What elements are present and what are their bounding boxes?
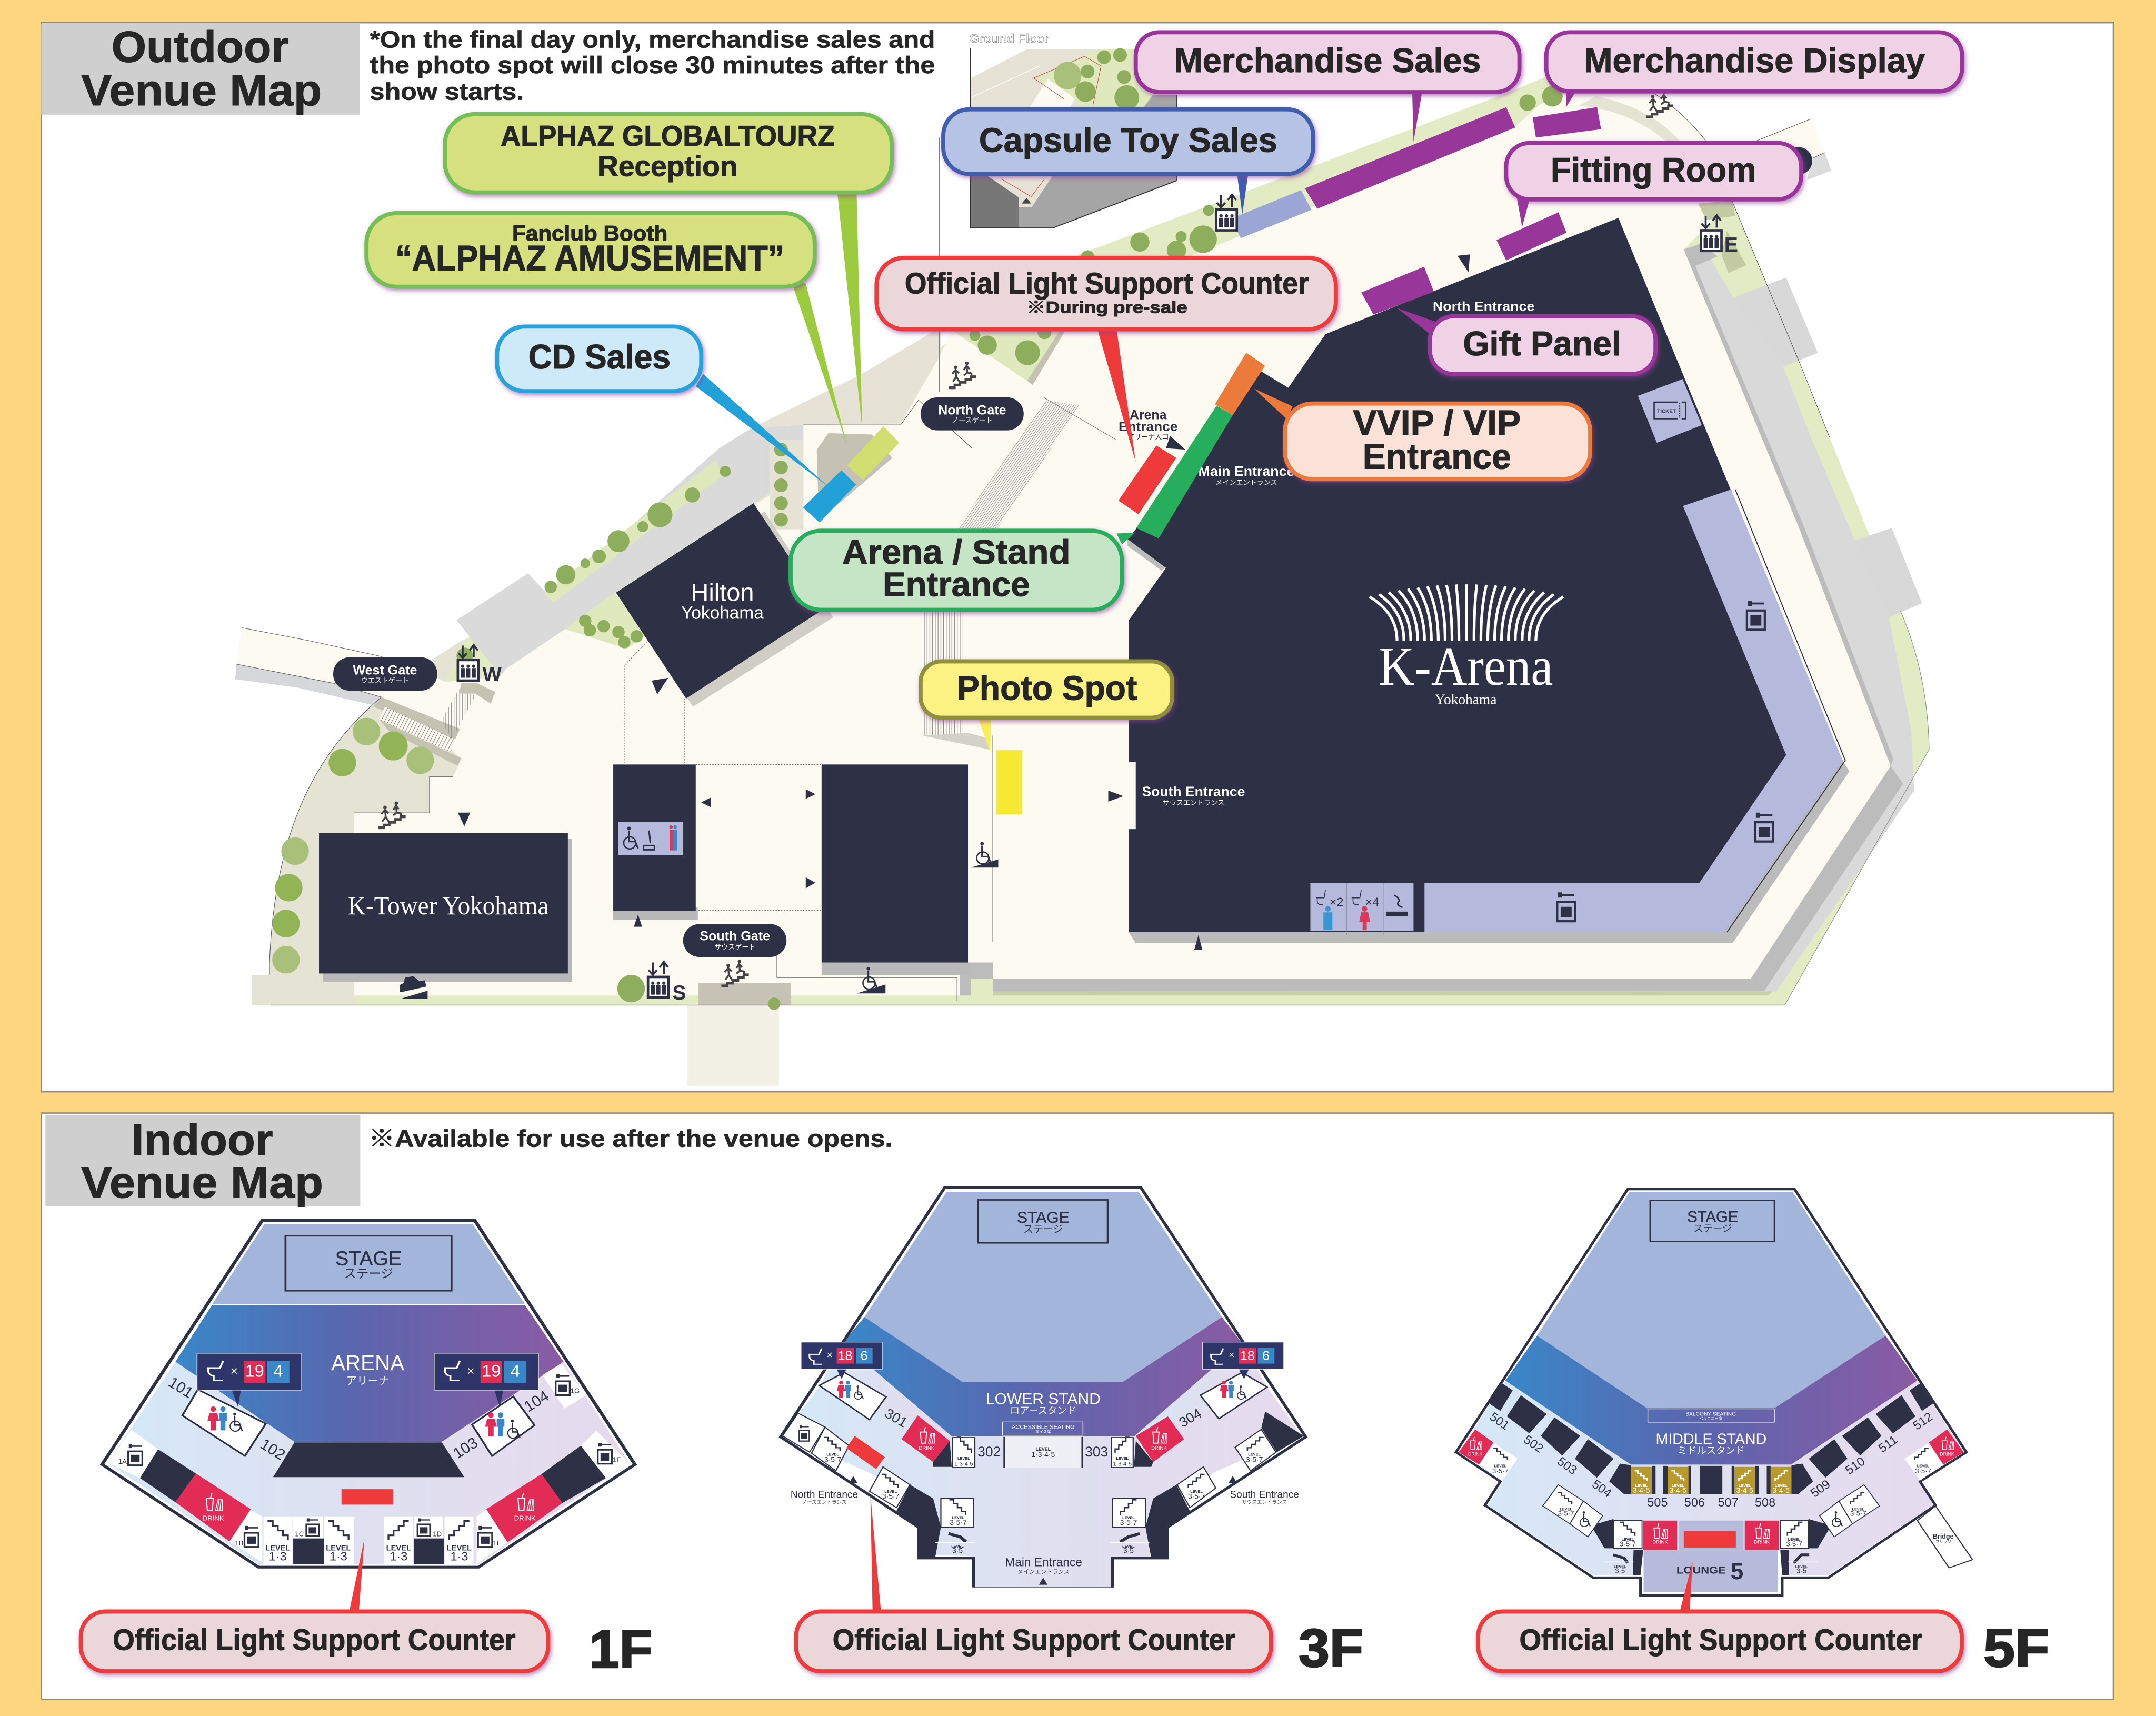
- stair cores: 1·3: [330, 1550, 347, 1563]
- site map ground: [235, 77, 1929, 1086]
- gold stairs: LEVEL: [1775, 1483, 1788, 1488]
- entrance labels: サウスエントランス: [1242, 1500, 1287, 1505]
- lockers: [108, 1363, 629, 1564]
- label: Main Entrance: メインエントランス: [1215, 478, 1277, 486]
- callout: Arena / Stand Entrance: Arena / Stand: [842, 533, 1071, 571]
- concessions: DRINK: [514, 1514, 536, 1522]
- stage box: ステージ: [1693, 1223, 1732, 1234]
- entrance labels: ノースエントランス: [802, 1500, 846, 1505]
- callout: Fitting Room: [1506, 143, 1801, 227]
- stage box: [285, 1236, 452, 1291]
- gate: West Gate: [333, 657, 437, 691]
- gold stairs: LEVEL: [1635, 1483, 1648, 1488]
- icon: elevator west: [458, 645, 502, 686]
- icons: stairs: [378, 91, 1673, 987]
- restroom count: right: 19: [482, 1362, 501, 1381]
- stair and accessibility icons: [1558, 1492, 1866, 1574]
- gate: West Gate: West Gate: [353, 663, 417, 677]
- restroom count: left: [197, 1353, 302, 1407]
- icons: accessible routes: [856, 842, 998, 993]
- bar: merchandise display: [1533, 107, 1601, 137]
- label: 1F: 1F: [589, 1619, 653, 1679]
- building: south block: [822, 764, 970, 975]
- restrooms: [819, 1372, 1267, 1420]
- restroom count: right: ×: [467, 1364, 475, 1379]
- corridor: [108, 1362, 629, 1564]
- stair icons: 1·3·4·5: [954, 1461, 973, 1467]
- label: South Entrance: サウスエントランス: [1163, 799, 1224, 806]
- corner concessions and stairs: LEVEL: [1494, 1463, 1507, 1468]
- gold stairs: LEVEL: [1672, 1483, 1684, 1488]
- concessions: DRINK: [203, 1514, 224, 1522]
- label: MIDDLE STAND: MIDDLE STAND: [1656, 1431, 1766, 1448]
- section numbers: 502: [1521, 1432, 1546, 1455]
- corner concessions and stairs: [1459, 1430, 1964, 1481]
- callout: 5F counter: [1478, 1561, 1962, 1671]
- callout: Gift Panel: Gift Panel: [1463, 324, 1621, 363]
- stage box: STAGE: [1017, 1209, 1070, 1226]
- lower stand: [842, 1317, 1242, 1436]
- stair and accessibility icons: LEVEL: [1614, 1564, 1626, 1569]
- stage: [212, 1224, 525, 1304]
- gate: North Gate: ノースゲート: [952, 416, 993, 424]
- stair icons: LEVEL: [884, 1489, 897, 1494]
- label: Arena Entrance: アリーナ入口: [1127, 433, 1169, 441]
- restroom count: left: 4: [273, 1362, 283, 1381]
- ticket counter: [1638, 379, 1702, 443]
- stair icons: 3·5·7: [1188, 1492, 1205, 1500]
- corner concessions and stairs: DRINK: [1940, 1452, 1954, 1457]
- gold stairs: 3·4·5: [1633, 1486, 1650, 1494]
- section numbers: 509: [1808, 1477, 1833, 1500]
- section numbers: [882, 1405, 1204, 1460]
- label: K-Arena: K-Arena: [1379, 636, 1553, 697]
- balcony seating: [1648, 1409, 1774, 1422]
- restroom block: [1310, 883, 1413, 935]
- callout: Official Light Support Counter pre-sale: Official Light Support Counter: [905, 267, 1309, 300]
- callout: VVIP / VIP Entrance: VVIP / VIP: [1353, 404, 1521, 443]
- stage box: STAGE: [1687, 1209, 1738, 1226]
- stair icons: LEVEL: [1122, 1515, 1135, 1520]
- callout: 1F counter: Official Light Support Counter: [113, 1623, 516, 1657]
- stairs and accessible boxes: [1543, 1485, 1880, 1548]
- restroom count: left: [801, 1342, 882, 1379]
- restroom count: right: [434, 1353, 538, 1407]
- gate: West Gate: ウエストゲート: [361, 676, 409, 684]
- stair icons: LEVEL: [1116, 1456, 1129, 1461]
- bar: light support counter: [1119, 445, 1176, 514]
- lounge: 5: [1731, 1559, 1743, 1584]
- seating block: [273, 1442, 464, 1477]
- entrance labels: Main Entrance: [1005, 1555, 1082, 1569]
- bar: arena/stand entrance: [1136, 406, 1233, 538]
- callout: Fitting Room: Fitting Room: [1551, 151, 1756, 189]
- accessible seating: [1003, 1422, 1083, 1435]
- label: Arena Entrance: Arena: [1130, 408, 1167, 423]
- building: Hilton Yokohama: Yokohama: [681, 603, 764, 623]
- stair icons: LEVEL: [951, 1544, 964, 1549]
- callout: ALPHAZ GLOBALTOURZ Reception: ALPHAZ GLOBALTOURZ: [501, 119, 835, 152]
- center seating: [1003, 1437, 1083, 1468]
- stage box: ステージ: [344, 1266, 393, 1280]
- corridor: [783, 1387, 1300, 1588]
- corner concessions and stairs: 3·5·7: [1915, 1467, 1931, 1475]
- stair cores: LEVEL: [386, 1544, 411, 1553]
- entrance arrows: [458, 254, 1470, 950]
- bridge: [1918, 1506, 1972, 1568]
- icon: elevator west: W: [482, 663, 502, 686]
- stair icons: 3·5: [952, 1547, 963, 1555]
- label: 3F: 3F: [1299, 1618, 1363, 1678]
- stair and accessibility icons: 3·5·7: [1786, 1540, 1802, 1548]
- restroom count: right: 6: [1262, 1349, 1270, 1363]
- accessible seating: 車イス席: [1035, 1429, 1051, 1434]
- section numbers: 101: [165, 1373, 196, 1402]
- callout: Arena / Stand Entrance: Entrance: [883, 565, 1030, 603]
- logo: K-Arena fan: [1370, 584, 1563, 641]
- stair boxes: [783, 1413, 1276, 1527]
- building: central block: [613, 764, 698, 920]
- label: ARENA: [331, 1351, 404, 1387]
- stair icons: 3·5·7: [1120, 1518, 1137, 1527]
- floor map: 3F: [781, 1188, 1306, 1588]
- title: Outdoor Venue Map: [41, 22, 360, 115]
- label: LOWER STAND: LOWER STAND: [986, 1390, 1101, 1408]
- stair and accessibility icons: 3·5: [1615, 1567, 1625, 1574]
- stair icons: LEVEL: [826, 1452, 839, 1457]
- building: Hilton Yokohama: [616, 503, 833, 707]
- note: after venue opens: ※Available for use after the venue opens.: [368, 1125, 892, 1152]
- label: South Entrance: South Entrance: [1142, 783, 1245, 799]
- trees: [272, 86, 1563, 1010]
- gold stairs: 3·4·5: [1670, 1486, 1686, 1494]
- bridge: ブリッジ: [1935, 1539, 1951, 1544]
- bar: photo spot: [996, 750, 1022, 814]
- concessions: DRINK: [1151, 1445, 1167, 1451]
- icon: elevator east: E: [1724, 234, 1738, 256]
- bar: VVIP entrance: [1215, 353, 1265, 415]
- label: Main Entrance: Main Entrance: [1199, 463, 1294, 479]
- title: Indoor Venue Map: Indoor: [131, 1115, 273, 1164]
- entrance labels: North Entrance: [791, 1489, 858, 1500]
- callout: Capsule Toy Sales: [943, 109, 1313, 215]
- restroom count: left: 6: [861, 1349, 867, 1363]
- section numbers: 503: [1555, 1454, 1580, 1477]
- note: final day: the photo spot will close 30 minutes after the: [370, 52, 935, 78]
- callout: Gift Panel: [1397, 308, 1655, 374]
- icon: elevator north: [1216, 195, 1237, 231]
- restroom count: right: [1203, 1342, 1284, 1379]
- section numbers: 507: [1718, 1495, 1739, 1509]
- bar: merchandise sales: [1305, 107, 1515, 209]
- callout: Fanclub Booth ALPHAZ AMUSEMENT: “ALPHAZ AMUSEMENT”: [395, 238, 784, 278]
- panel: indoor venue map: [41, 1113, 2113, 1700]
- label: ARENA: アリーナ: [346, 1375, 390, 1387]
- arena floor: [175, 1305, 564, 1442]
- callout: 5F counter: Official Light Support Counter: [1520, 1623, 1922, 1657]
- label: Main Entrance: [1199, 463, 1294, 486]
- callout: Arena / Stand Entrance: [791, 531, 1135, 610]
- balcony seating: バルコニー席: [1699, 1416, 1722, 1421]
- south entrance door: [1129, 762, 1136, 829]
- stair and accessibility icons: LEVEL: [1560, 1507, 1572, 1512]
- stair and accessibility icons: 3·5: [1796, 1567, 1806, 1574]
- entrance labels: [791, 1476, 1299, 1585]
- callout: VVIP / VIP Entrance: Entrance: [1363, 437, 1511, 477]
- booth base: [817, 433, 892, 507]
- entrance labels: South Entrance: [1230, 1489, 1299, 1500]
- section numbers: 505: [1647, 1495, 1668, 1509]
- gold stairs: 3·4·5: [1736, 1486, 1753, 1494]
- bridge: Bridge: [1933, 1533, 1954, 1540]
- note: final day: show starts.: [370, 78, 524, 105]
- stair cores: [264, 1517, 474, 1564]
- stair and accessibility icons: LEVEL: [1795, 1564, 1808, 1569]
- section numbers: [165, 1373, 552, 1464]
- stair icons: 1·3·4·5: [1113, 1461, 1132, 1467]
- lockers: 1E: [493, 1539, 502, 1547]
- gold stairs: [1631, 1467, 1791, 1494]
- seating blocks: [1488, 1382, 1935, 1575]
- middle stand: [1505, 1335, 1918, 1464]
- label: LOWER STAND: ロアースタンド: [1010, 1405, 1076, 1416]
- restroom block: ×4: [1365, 895, 1379, 909]
- section numbers: 104: [521, 1387, 552, 1415]
- outer wall: [1456, 1189, 1967, 1595]
- label: 5F: 5F: [1983, 1618, 2050, 1678]
- icon: elevator east: [1701, 215, 1738, 256]
- section numbers: 302: [977, 1444, 1001, 1460]
- lockers: 1F: [613, 1456, 621, 1464]
- bar: capsule toys: [1231, 190, 1312, 238]
- icon: car ramp: [400, 976, 427, 999]
- inset label: Ground Floor: [970, 32, 1049, 45]
- stair icons: 3·5·7: [950, 1518, 967, 1527]
- counter location: [846, 1436, 885, 1469]
- callout: Merchandise Sales: [1136, 32, 1520, 142]
- accessible seating: ACCESSIBLE SEATING: [1012, 1424, 1075, 1430]
- callout: Merchandise Sales: Merchandise Sales: [1174, 41, 1481, 79]
- section numbers: 103: [450, 1434, 481, 1462]
- title: Indoor Venue Map: [45, 1115, 360, 1207]
- stair icons: 3·5·7: [824, 1455, 842, 1463]
- bar: fanclub reception: [847, 426, 899, 480]
- label: LOWER STAND: [986, 1390, 1101, 1416]
- stations: colored areas: [803, 107, 1601, 814]
- callout: CD Sales: [497, 326, 829, 487]
- floor map: 1F: [102, 1220, 635, 1567]
- stage: [1537, 1192, 1885, 1408]
- gate: North Gate: North Gate: [938, 403, 1006, 418]
- title: Outdoor Venue Map: Venue Map: [81, 65, 322, 115]
- restrooms: [183, 1390, 534, 1456]
- label: Yokohama: Yokohama: [1435, 691, 1496, 707]
- label: Arena Entrance: [1119, 408, 1177, 441]
- callout: VVIP / VIP Entrance: [1254, 388, 1590, 479]
- callout: Official Light Support Counter pre-sale: ※During pre-sale: [1026, 298, 1187, 316]
- concessions: [1643, 1521, 1779, 1550]
- lounge: [1643, 1521, 1779, 1592]
- note: final day: [370, 26, 935, 105]
- callout: Capsule Toy Sales: Capsule Toy Sales: [979, 121, 1277, 159]
- restroom count: right: ×: [1229, 1350, 1234, 1361]
- stair cores: 1·3: [390, 1550, 407, 1563]
- gold stairs: LEVEL: [1739, 1483, 1751, 1488]
- gate: South Gate: サウスゲート: [714, 943, 755, 951]
- label: South Entrance: [1142, 783, 1245, 806]
- label: ARENA: ARENA: [331, 1351, 404, 1375]
- building: K-Tower Yokohama: [319, 833, 572, 982]
- callout: Merchandise Display: Merchandise Display: [1584, 41, 1925, 79]
- label: MIDDLE STAND: [1656, 1431, 1766, 1456]
- stair cores: LEVEL: [447, 1544, 472, 1553]
- callout: 3F counter: [796, 1494, 1271, 1671]
- stage box: [1650, 1201, 1774, 1242]
- stair and accessibility icons: LEVEL: [1852, 1507, 1865, 1512]
- title: Outdoor Venue Map: Outdoor: [112, 22, 289, 72]
- concessions: DRINK: [1754, 1540, 1770, 1545]
- callout: Photo Spot: Photo Spot: [957, 669, 1137, 707]
- stair cores: 1·3: [450, 1550, 468, 1563]
- section numbers: 508: [1755, 1495, 1775, 1509]
- restroom count: left: ×: [827, 1350, 833, 1361]
- floor map: 5F: [1456, 1189, 1972, 1595]
- corner concessions and stairs: 3·5·7: [1492, 1467, 1509, 1475]
- note: final day: *On the final day only, merchandise sales and: [370, 26, 935, 53]
- stage box: ステージ: [1023, 1224, 1063, 1235]
- gate: South Gate: South Gate: [700, 929, 770, 944]
- callout: Fanclub Booth ALPHAZ AMUSEMENT: Fanclub Booth: [512, 221, 667, 245]
- stair icons: 3·5·7: [1246, 1455, 1263, 1463]
- callout: CD Sales: CD Sales: [528, 337, 671, 376]
- stage box: STAGE: [335, 1247, 402, 1270]
- section numbers: 512: [1910, 1410, 1935, 1433]
- icon: elevator south: [648, 962, 686, 1004]
- corridor: [1459, 1381, 1964, 1575]
- stair icons: [799, 1425, 1264, 1555]
- label: MIDDLE STAND: ミドルスタンド: [1678, 1445, 1745, 1456]
- stair cores: 1C: [295, 1530, 304, 1538]
- callout: Merchandise Display: [1546, 32, 1962, 107]
- bar: fitting room: [1496, 212, 1566, 261]
- ticket counter: TICKET: [1657, 408, 1676, 414]
- gold stairs: 3·4·5: [1772, 1486, 1790, 1494]
- counter location: [1684, 1531, 1736, 1548]
- label: Arena Entrance: Entrance: [1119, 420, 1177, 434]
- section numbers: 501: [1488, 1410, 1512, 1433]
- concessions: [140, 1446, 606, 1542]
- center seating: 1·3·4·5: [1031, 1450, 1055, 1459]
- stair cores: LEVEL: [326, 1544, 351, 1553]
- building: K-Arena: [1127, 218, 1849, 943]
- callout: Fanclub Booth ALPHAZ AMUSEMENT: [366, 213, 847, 445]
- entrance labels: メインエントランス: [1017, 1569, 1070, 1575]
- label: North Entrance: North Entrance: [1433, 300, 1534, 314]
- counter location: [342, 1489, 393, 1504]
- concessions: DRINK: [919, 1445, 935, 1451]
- restroom sign: [618, 822, 683, 855]
- center seating: LEVEL: [1036, 1446, 1051, 1452]
- section numbers: 102: [257, 1435, 288, 1464]
- stair icons: LEVEL: [1248, 1452, 1261, 1457]
- stair icons: 3·5: [1123, 1547, 1134, 1555]
- restroom count: right: 4: [511, 1362, 520, 1381]
- outer wall: [781, 1188, 1306, 1588]
- section numbers: [1488, 1410, 1935, 1509]
- section numbers: 510: [1843, 1454, 1868, 1477]
- bar: CD sales: [803, 470, 856, 523]
- restroom count: left: ×: [231, 1364, 238, 1379]
- stair icons: LEVEL: [957, 1456, 970, 1461]
- callout: 3F counter: Official Light Support Counter: [833, 1623, 1235, 1657]
- callout: ALPHAZ GLOBALTOURZ Reception: Reception: [597, 149, 737, 182]
- stair icons: 3·5·7: [882, 1492, 900, 1500]
- corner concessions and stairs: LEVEL: [1917, 1463, 1930, 1468]
- stage box: [978, 1200, 1107, 1243]
- building: K-Tower Yokohama: K-Tower Yokohama: [348, 891, 548, 920]
- bar: gift panel: [1361, 267, 1434, 315]
- title: Indoor Venue Map: Venue Map: [81, 1158, 323, 1207]
- building: Hilton Yokohama: Hilton: [691, 578, 754, 606]
- balcony seating: BALCONY SEATING: [1685, 1412, 1736, 1418]
- lockers: 1G: [571, 1387, 580, 1395]
- stair icons: LEVEL: [1190, 1489, 1203, 1494]
- outer wall: [102, 1220, 635, 1567]
- gate: North Gate: [921, 397, 1024, 431]
- section numbers: 511: [1876, 1433, 1900, 1455]
- gate: South Gate: [683, 924, 786, 957]
- section numbers: 301: [882, 1405, 910, 1431]
- section numbers: 304: [1176, 1405, 1204, 1431]
- walls: [896, 1412, 1304, 1558]
- icons: lockers: [1557, 601, 1773, 921]
- lounge: LOUNGE: [1676, 1565, 1726, 1577]
- stair and accessibility icons: 3·5·7: [1620, 1540, 1636, 1548]
- panel: outdoor venue map: [41, 22, 2113, 1092]
- inset: ground floor map: [970, 32, 1176, 228]
- section numbers: 303: [1085, 1444, 1108, 1460]
- stair cores: LEVEL: [265, 1544, 290, 1553]
- stage: [864, 1192, 1222, 1382]
- stair and accessibility icons: 3·5·7: [1850, 1510, 1866, 1518]
- restroom block: ×2: [1330, 895, 1344, 909]
- restroom count: left: 19: [245, 1362, 264, 1381]
- callout: ALPHAZ GLOBALTOURZ Reception: [445, 114, 892, 428]
- stair and accessibility icons: 3·5·7: [1558, 1510, 1574, 1518]
- stair cores: 1D: [433, 1530, 442, 1538]
- stair and accessibility icons: LEVEL: [1788, 1537, 1801, 1542]
- restroom count: right: 18: [1240, 1349, 1255, 1363]
- section numbers: 504: [1590, 1477, 1614, 1500]
- lockers: 1B: [235, 1539, 244, 1547]
- lockers: 1A: [118, 1458, 127, 1465]
- locker corridor band: [1424, 490, 1842, 932]
- concessions: DRINK: [1652, 1540, 1669, 1545]
- stair cores: 1·3: [269, 1550, 287, 1563]
- restroom count: left: 18: [838, 1349, 852, 1363]
- callout: Official Light Support Counter pre-sale: [876, 258, 1336, 462]
- stair icons: LEVEL: [1122, 1544, 1135, 1549]
- icon: elevator south: S: [672, 982, 686, 1004]
- concessions: [902, 1415, 1184, 1462]
- callout: Photo Spot: [921, 661, 1172, 752]
- stair icons: LEVEL: [952, 1515, 965, 1520]
- section numbers: 506: [1684, 1495, 1705, 1509]
- stair and accessibility icons: LEVEL: [1622, 1537, 1634, 1542]
- corner concessions and stairs: DRINK: [1468, 1452, 1483, 1457]
- callout: 1F counter: [81, 1539, 548, 1671]
